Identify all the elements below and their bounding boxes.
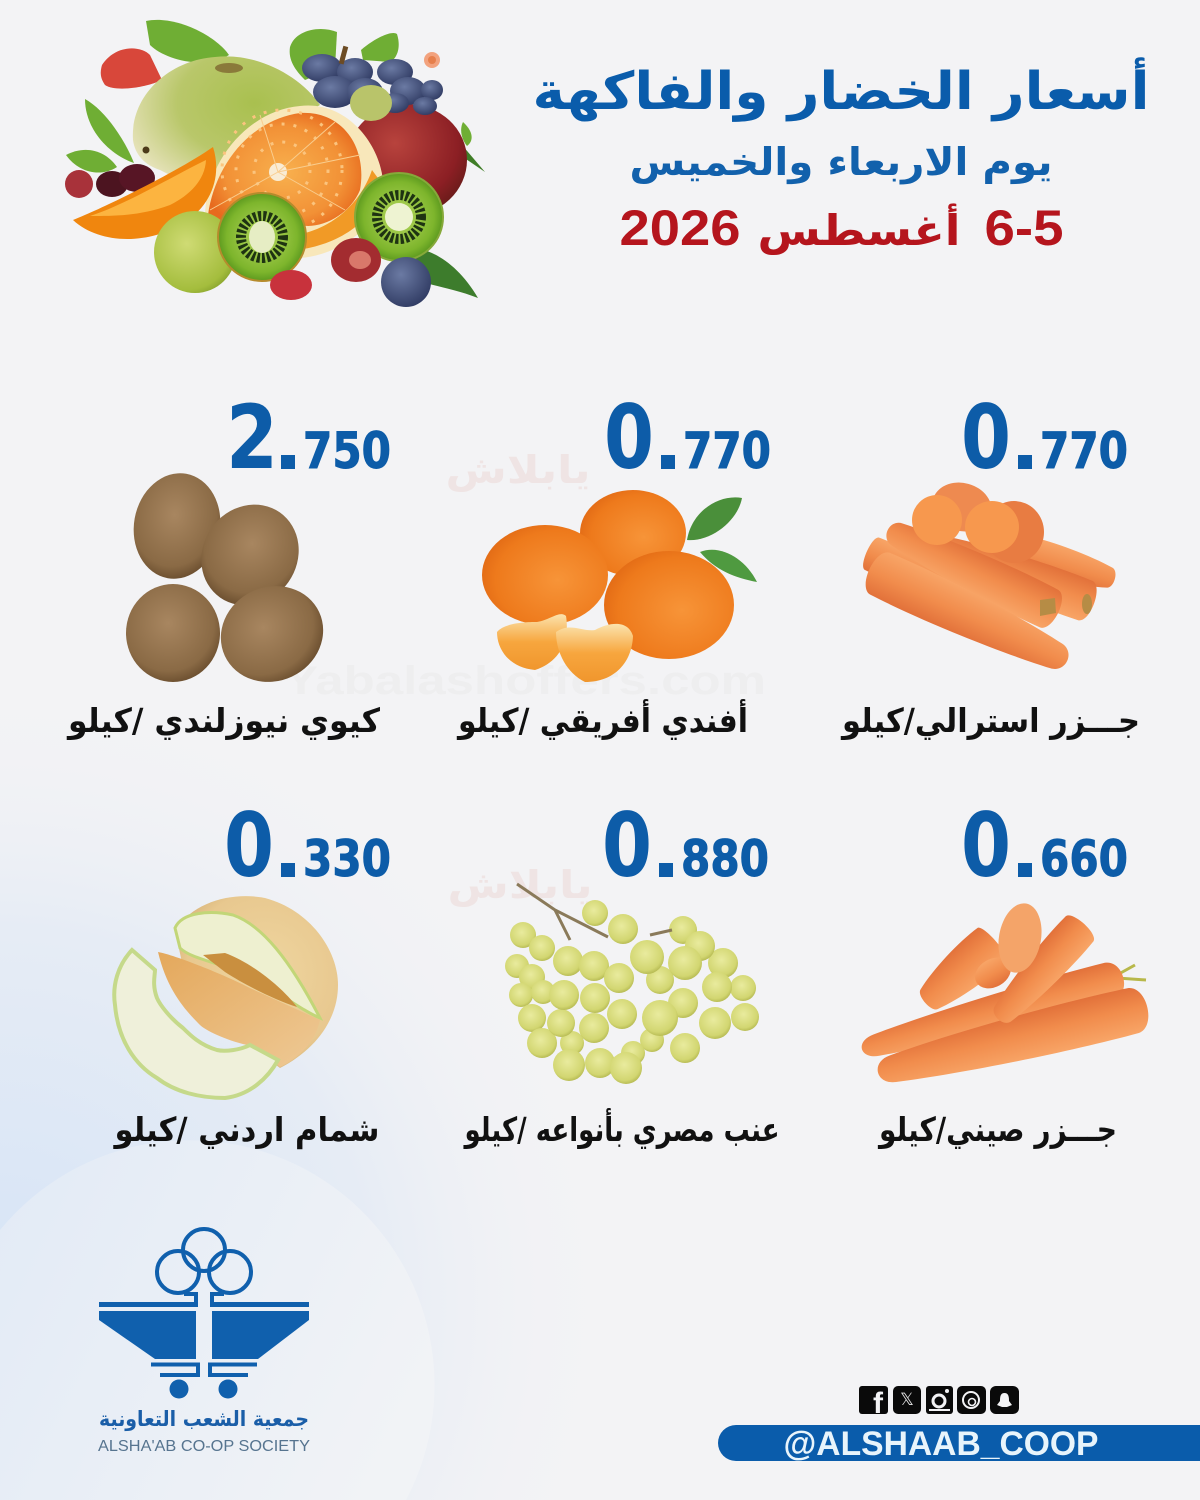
image: mandarins: [482, 490, 757, 682]
icon: snapchat: [990, 1386, 1019, 1414]
title: أسعار الخضار والفاكهة: [532, 57, 1150, 122]
product: Egyptian grapes: [463, 794, 780, 1150]
label: شمام اردني /كيلو: [113, 1110, 379, 1150]
berries: [331, 238, 381, 282]
icon: x: 𝕏: [900, 1390, 914, 1409]
price: 660: [1040, 830, 1128, 888]
price: 0: [224, 794, 274, 897]
icon: instagram: [926, 1386, 953, 1414]
pear: [133, 56, 320, 190]
image: carrots: [857, 900, 1153, 1095]
handle bar: [718, 1425, 1200, 1463]
watermarks: يابلاش: [446, 448, 590, 492]
price: 0: [961, 794, 1011, 897]
price: 770: [1040, 422, 1128, 480]
handle bar: @ALSHAAB_COOP: [784, 1425, 1098, 1463]
label: كيوي نيوزلندي /كيلو: [66, 701, 381, 741]
price: 770: [683, 422, 771, 480]
price: 880: [681, 830, 769, 888]
product: Jordanian melon: [113, 794, 391, 1150]
price: [961, 386, 1128, 489]
strawberry: [101, 48, 162, 89]
product: Chinese carrots: [857, 794, 1153, 1150]
orange half: [205, 106, 383, 258]
mango: [347, 104, 467, 216]
date: [620, 200, 1064, 256]
date: 2026: [620, 200, 740, 256]
logo english name: ALSHA'AB CO-OP SOCIETY: [98, 1438, 310, 1455]
price: [604, 386, 771, 489]
logo arabic name: جمعية الشعب التعاونية: [99, 1407, 309, 1431]
label: جـــزر استرالي/كيلو: [840, 701, 1140, 741]
icon: facebook: f: [873, 1387, 884, 1420]
price: [602, 794, 769, 897]
product: Australian carrots: [840, 386, 1140, 741]
image: carrots: [860, 476, 1120, 682]
image: kiwis: [125, 466, 339, 699]
price: [961, 794, 1128, 897]
icon: facebook: [859, 1386, 888, 1420]
label: أفندي أفريقي /كيلو: [456, 699, 748, 741]
product: New Zealand kiwi: [66, 386, 391, 741]
watermarks: Yabalashoffers.com: [284, 659, 766, 703]
apple: [154, 211, 236, 293]
price: 750: [303, 422, 391, 480]
icon: x: [893, 1386, 921, 1414]
price: 0: [604, 386, 654, 489]
price: [224, 794, 391, 897]
subtitle: days: يوم الاربعاء والخميس: [630, 140, 1052, 185]
price: 0: [602, 794, 652, 897]
watermarks: [284, 448, 766, 907]
illustration: fruit collage: [65, 20, 485, 307]
date: 6-5: [984, 200, 1064, 256]
leaves: [66, 20, 485, 298]
grapes: [302, 54, 443, 115]
image: grapes: [505, 884, 759, 1084]
icon: threads: [957, 1386, 986, 1414]
social icons: [859, 1386, 1019, 1420]
cherries: [65, 170, 93, 198]
label: جـــزر صيني/كيلو: [877, 1110, 1117, 1150]
orange wedge: [73, 147, 216, 239]
image: melon: [114, 896, 338, 1098]
product: African mandarin: [456, 386, 771, 741]
price: [226, 386, 391, 489]
icon: rings and cart: [99, 1229, 309, 1398]
watermarks: يابلاش: [448, 863, 592, 907]
price: 0: [961, 386, 1011, 489]
price: 330: [303, 830, 391, 888]
price: 2: [226, 386, 278, 489]
label: عنب مصري بأنواعه /كيلو: [463, 1108, 780, 1150]
date: أغسطس: [758, 203, 960, 255]
kiwi right: [355, 173, 443, 261]
kiwi left: [218, 193, 306, 281]
logo: Alsha'ab Co-op Society: [98, 1229, 310, 1455]
